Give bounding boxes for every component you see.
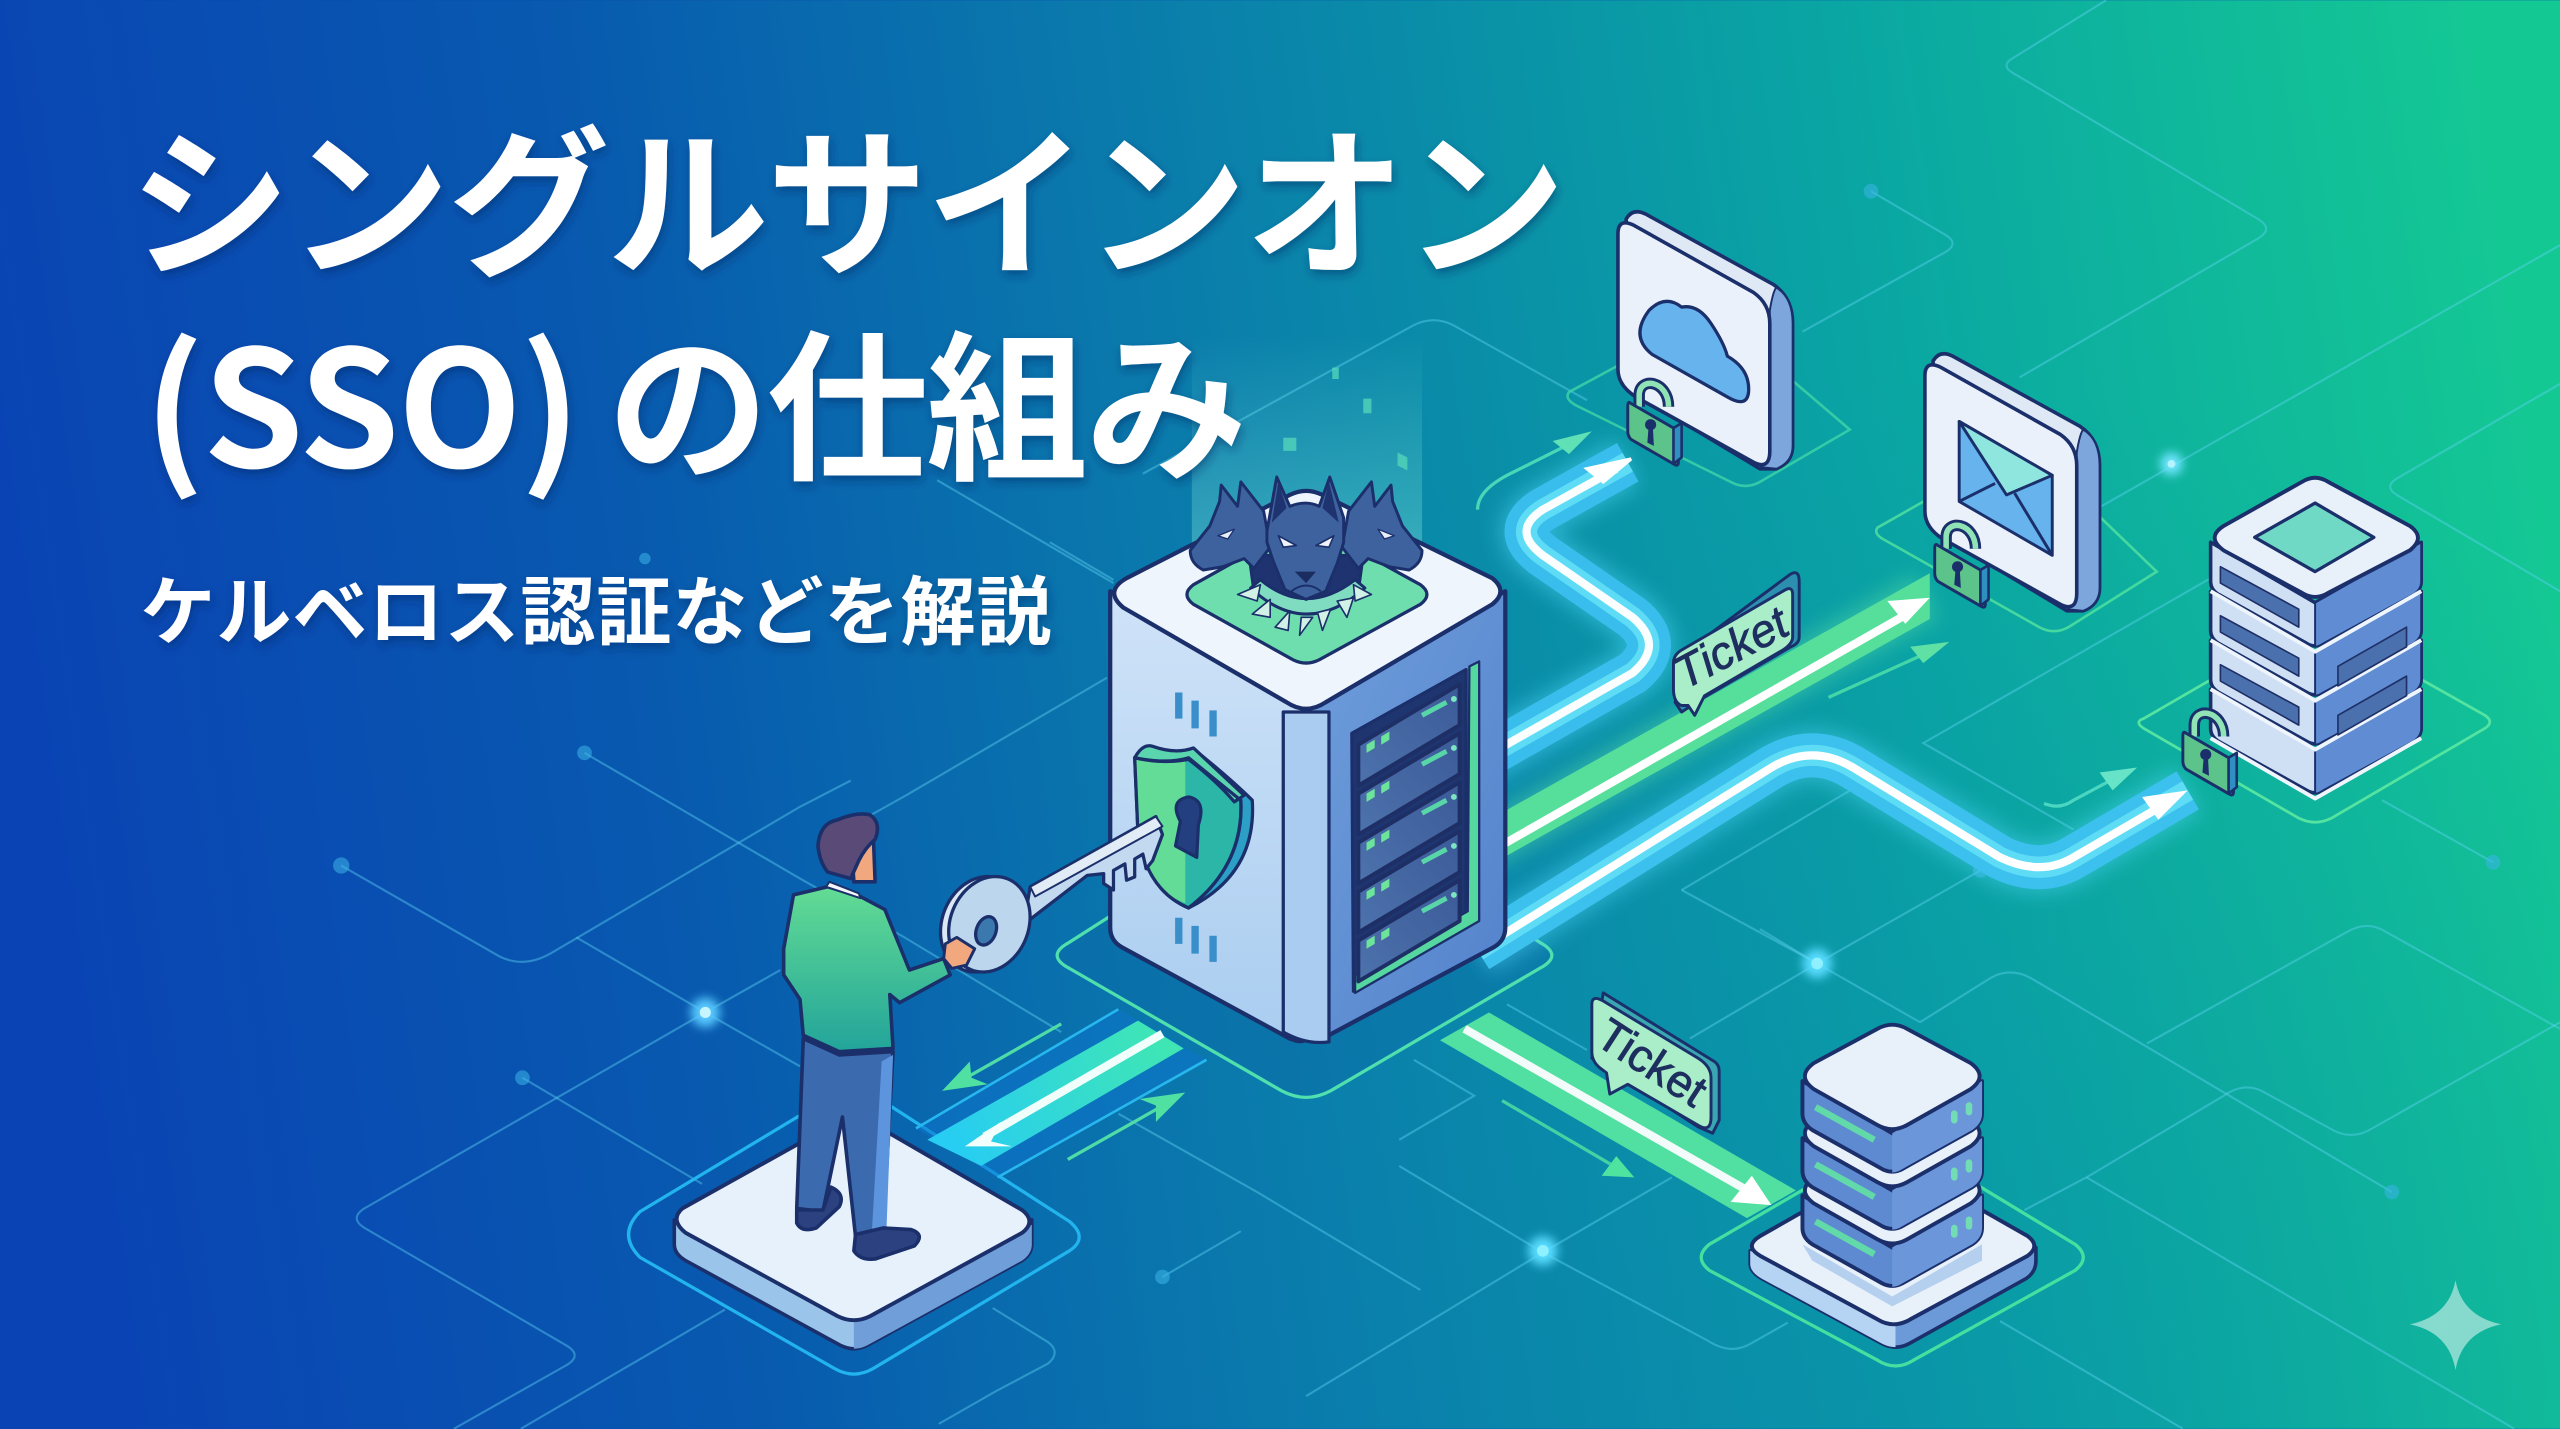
legs [797,1039,893,1236]
collar [826,882,860,898]
hair [818,814,877,879]
vents [1179,692,1213,962]
rack frame [1352,670,1466,991]
envelope icon [1959,421,2052,555]
platform outline: server [1057,803,1552,1097]
platform outline: mail card [1876,444,2157,631]
server left face [1110,591,1306,1041]
server top green opening [1187,527,1427,663]
arrow: route to mail [1478,573,1949,872]
server right face [1306,591,1505,1041]
glowing network nodes [691,452,2183,1266]
shield with keyhole [1135,746,1253,908]
layers [1802,1139,1982,1287]
right server stack [2211,478,2421,799]
grid node dots [333,184,2500,1284]
cloud icon [1640,301,1749,402]
center head [1267,477,1344,599]
person with key [784,814,975,1259]
icon: lock on mail card [1935,525,1989,607]
app card: cloud [1618,212,1793,469]
platform outline: user [629,1088,1079,1374]
rack green trim [1355,661,1479,993]
shoes [797,1187,919,1259]
app card: mail [1925,354,2100,611]
right head [1342,482,1422,570]
platform outline: bottom server [1701,1141,2083,1366]
user platform [674,1117,1032,1349]
title line 1: シングルサインオン [129,76,1566,310]
icon: lock on cloud card [1628,383,1682,465]
ticket bubble lower: Ticket [1588,1009,1716,1117]
bottom server stack [1750,1025,2036,1347]
server corner strip [1283,712,1329,1042]
platform outline: right server [2139,625,2490,822]
right server teal inset [2255,503,2374,572]
server tower [1110,491,1505,1042]
platform outline: cloud card [1568,314,1850,486]
server top face [1114,491,1500,709]
arrow: route to bottom server [1440,1012,1796,1218]
arrow: login path between user and server [916,1009,1207,1177]
sparkle watermark [2410,1280,2501,1370]
hand [944,937,975,968]
cerberus three-headed dog [1190,477,1422,635]
cerberus light beam [1192,335,1422,547]
arrow: route to cloud [1478,431,1649,761]
left head [1190,482,1270,570]
base plate [1750,1248,2036,1347]
arrow: route to right server [1478,755,2188,950]
icon: lock on right server [2183,713,2237,795]
title line 2: (SSO) [144,280,581,514]
subtitle: ケルベロス認証などを解説 [140,552,1051,661]
rack rows [1358,684,1460,981]
torso [784,887,950,1052]
ticket bubble upper: Ticket [1665,596,1799,699]
title line 2: の仕組み [607,280,1247,514]
dark chest [1249,555,1363,611]
key [927,817,1162,984]
rack slots [2220,567,2407,735]
neck and face [852,839,875,882]
right server top face [2215,478,2418,597]
collar [1238,580,1371,635]
